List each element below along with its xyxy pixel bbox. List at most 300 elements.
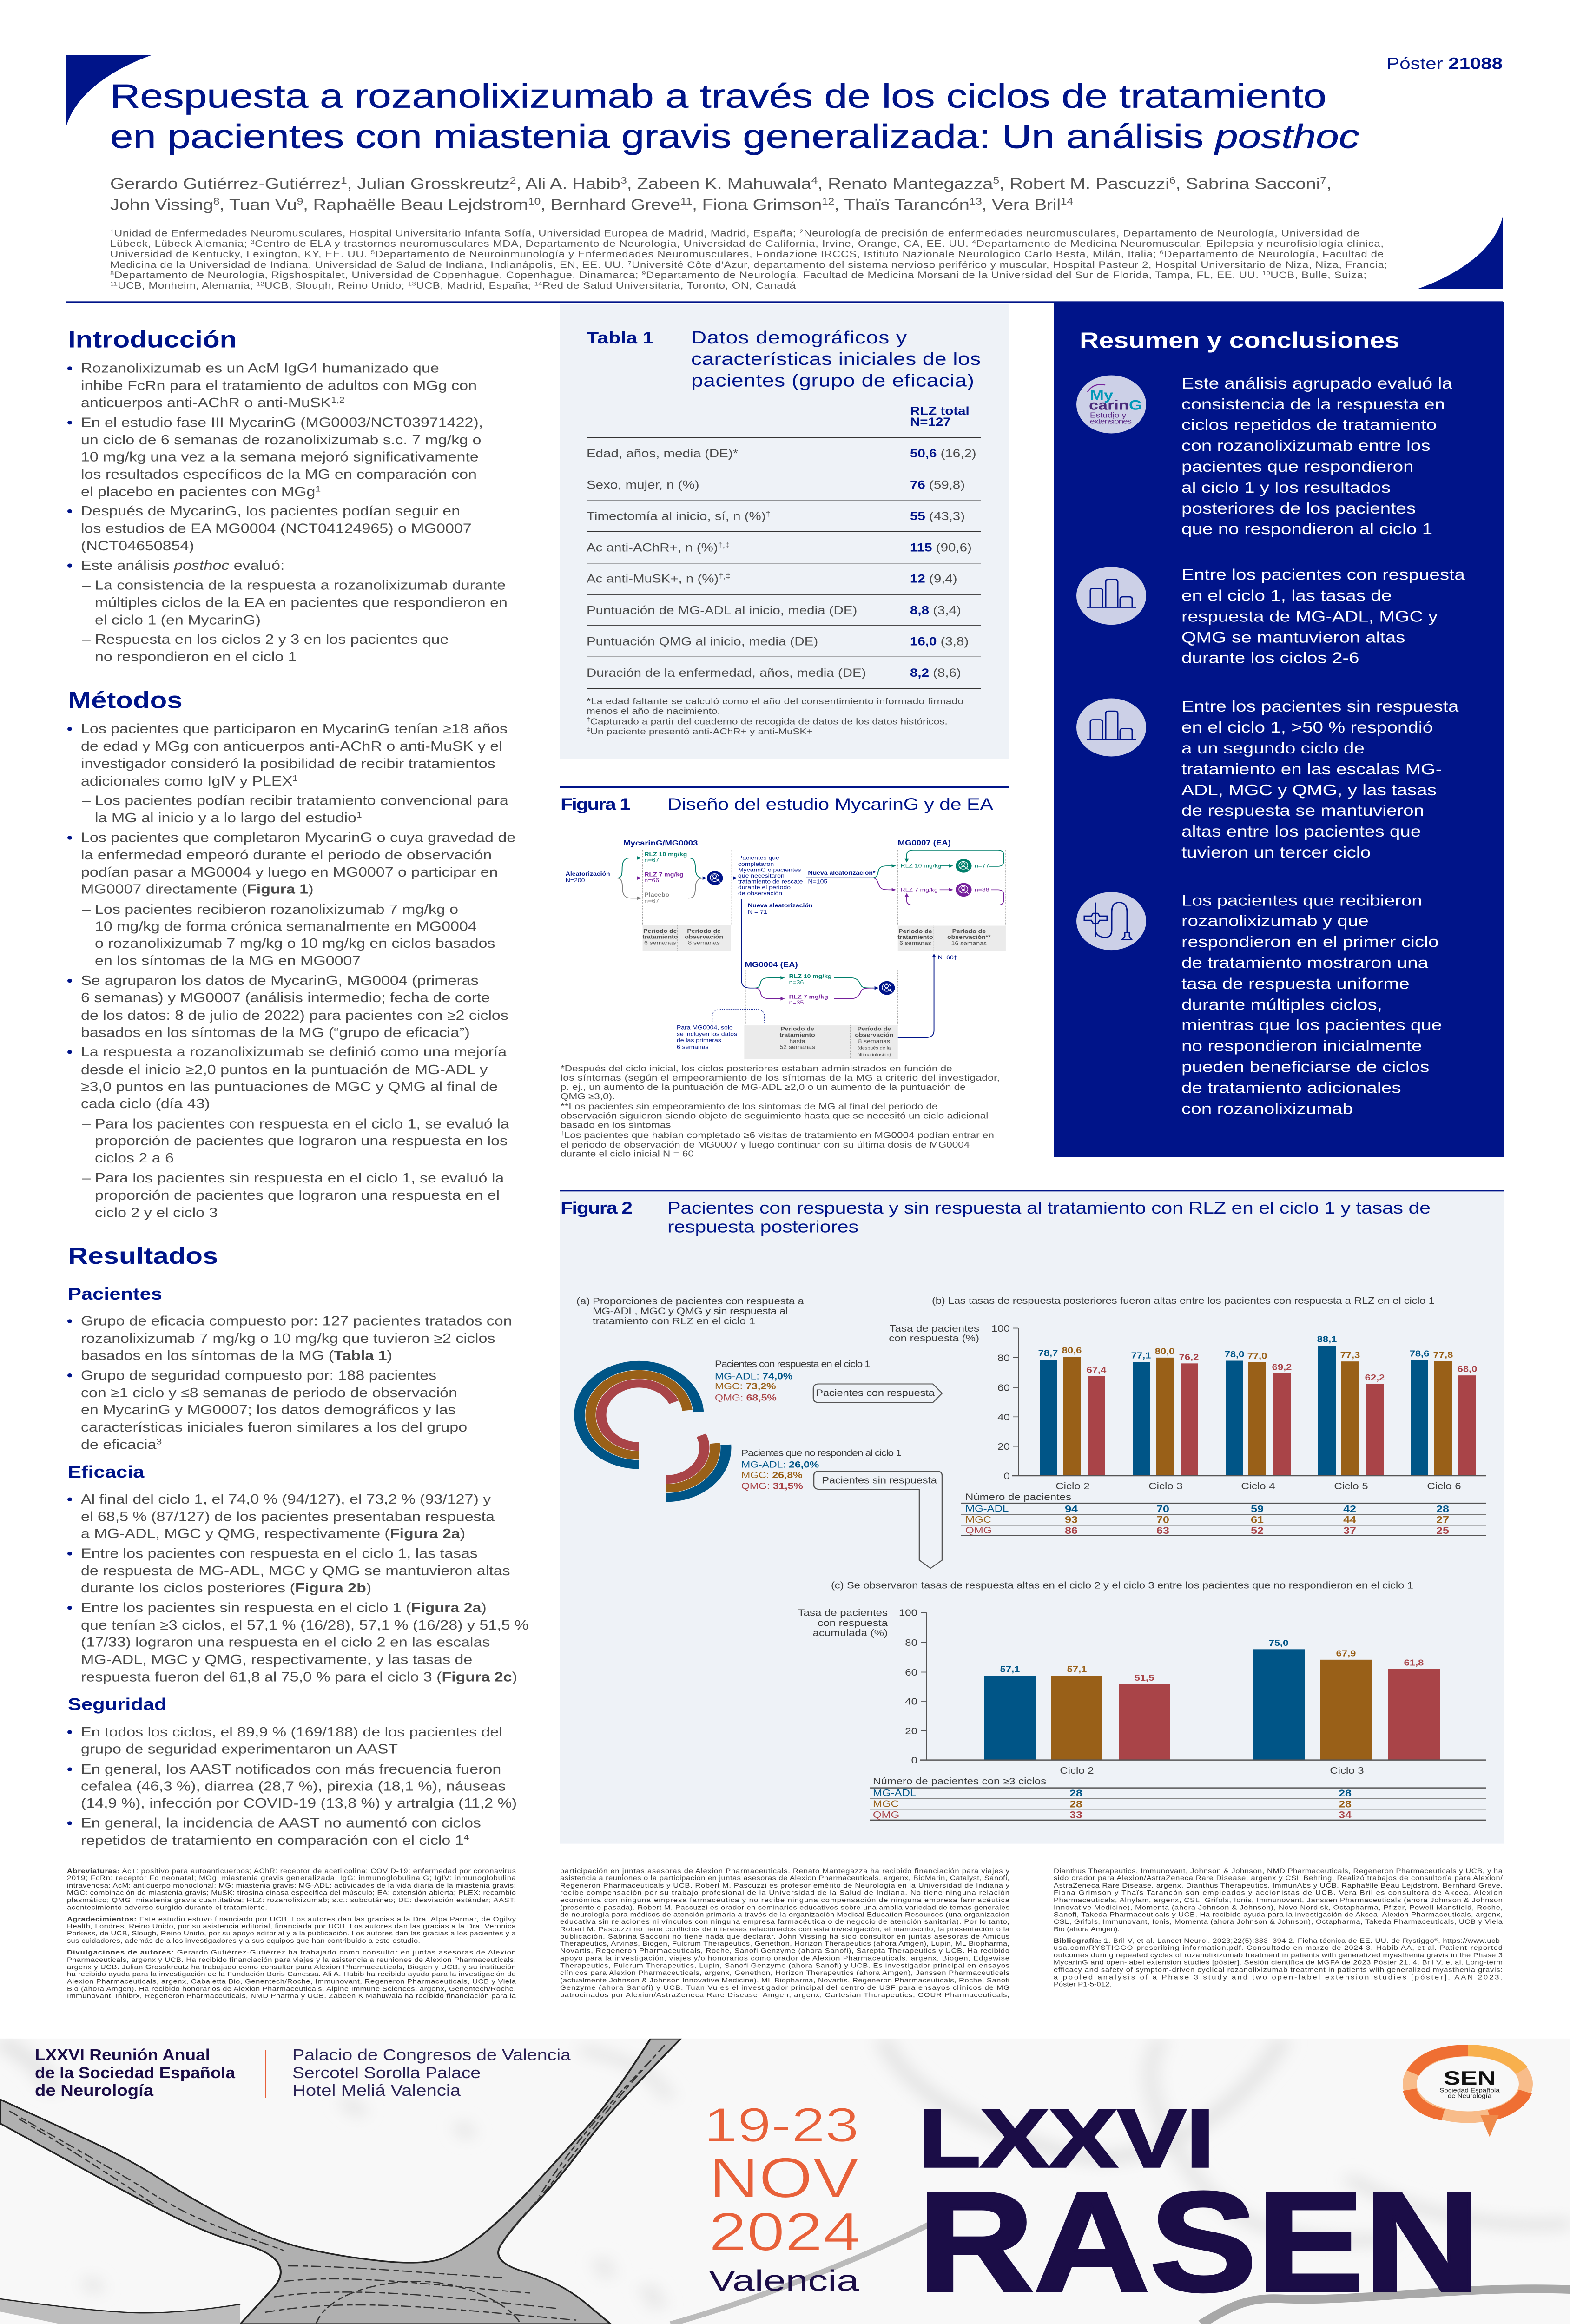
chart b patient table bbox=[961, 1492, 1486, 1536]
chart b patient table: 61 bbox=[1251, 1514, 1264, 1525]
footer text column 2: clínicos para Alexion Pharmaceuticals, argenx, Genethon, Horizon Therapeutics (ahora Amgen), Janssen Pharmaceuticals bbox=[560, 1969, 1009, 1977]
text block: seguridad bullets bbox=[67, 1724, 517, 1848]
footer text column 1: 2019; FcRn: receptor Fc neonatal; MGg: miastenia gravis generalizada; IgG: inmunoglobulina G; IgIV: inmunoglobulina bbox=[67, 1875, 516, 1882]
note on MG0004 bbox=[677, 1024, 738, 1050]
chart c y axis label: con respuesta bbox=[818, 1618, 888, 1628]
poster number: Póster 21088 bbox=[1386, 55, 1503, 73]
non-responder legend: Pacientes que no responden al ciclo 1 bbox=[741, 1448, 902, 1458]
text block: métodos bullets: proporción de pacientes que lograron una respuesta en el bbox=[95, 1188, 500, 1202]
title bbox=[110, 77, 1359, 155]
title: Respuesta a rozanolixizumab a través de los ciclos de tratamiento bbox=[110, 77, 1326, 115]
table footnotes: †Capturado a partir del cuaderno de recogida de datos de los datos históricos. bbox=[587, 716, 948, 726]
text block: eficacia bullets: durante los ciclos posteriores (Figura 2b) bbox=[81, 1580, 371, 1595]
text block: métodos bullets: – bbox=[82, 1171, 91, 1186]
subfigure b heading: (b) Las tasas de respuesta posteriores fueron altas entre los pacientes con respuesta a RLZ en el ciclo 1 bbox=[932, 1295, 1435, 1306]
mycaring arm labels: n=66 bbox=[644, 877, 659, 884]
table rows: Timectomía al inicio, sí, n (%)† bbox=[587, 510, 771, 523]
text block: métodos bullets: Para los pacientes con respuesta en el ciclo 1, se evaluó la bbox=[95, 1116, 509, 1131]
text block: seguridad bullets: grupo de seguridad experimentaron un AAST bbox=[81, 1742, 398, 1756]
text block: métodos bullets: ciclo 2 y el ciclo 3 bbox=[95, 1205, 218, 1220]
MG0004 labels bbox=[748, 902, 957, 1006]
chart b axis ticks bbox=[991, 1323, 1010, 1481]
logo: SEN: de Neurología bbox=[1448, 2093, 1491, 2099]
flowchart headings bbox=[623, 838, 951, 969]
text block: métodos bullets: cada ciclo (día 43) bbox=[81, 1096, 210, 1111]
footer text column 3: sido orador para Alexion/AstraZeneca Rare Disease, argenx y CSL Behring. Realizó trabajos de consultoría para Alexion/ bbox=[1054, 1875, 1503, 1882]
footer text column 1: Porkess, de UCB, Slough, Reino Unido, por su apoyo editorial y a la publicación. Los autores dan las gracias a los pacientes y a bbox=[67, 1930, 516, 1937]
summary text 2: en el ciclo 1, las tasas de bbox=[1181, 587, 1392, 604]
text block: métodos bullets: la MG al inicio y a lo largo del estudio1 bbox=[95, 811, 362, 825]
chart c y axis label bbox=[798, 1608, 888, 1638]
chart b values: 80,0 bbox=[1155, 1347, 1174, 1356]
table column header: N=127 bbox=[910, 415, 951, 428]
figura 2 title: respuesta posteriores bbox=[667, 1218, 858, 1236]
chart b axis ticks: 80 bbox=[997, 1353, 1010, 1363]
footer text column 3: efficacy and safety of symptom-driven cyclical rozanolixizumab treatment in patients with generalized myasthenia gravis: bbox=[1054, 1967, 1503, 1974]
summary text 1: que no respondieron al ciclo 1 bbox=[1181, 520, 1432, 537]
text block: introducción bullets: La consistencia de la respuesta a rozanolixizumab durante bbox=[95, 578, 506, 593]
figura 1 footnotes: p. ej., un aumento de la puntuación de MG-ADL ≥2,0 o un aumento de la puntuación de bbox=[561, 1083, 966, 1092]
footer text column 1: plasmático; QMG: miastenia gravis cuantitativa; RLZ: rozanolixizumab; s.c.: subcutáneo; DE: desviación estándar; AAST: bbox=[67, 1897, 516, 1904]
flowchart: figura 1 bbox=[566, 838, 1006, 1059]
text block: introducción bullets: anticuerpos anti-AChR o anti-MuSK1,2 bbox=[81, 395, 345, 410]
figura 2 label: Figura 2 bbox=[561, 1199, 633, 1217]
footer text column 2: publicación. Sabrina Sacconi no tiene nada que declarar. John Vissing ha sido consultor en juntas asesoras de Amicus bbox=[560, 1933, 1009, 1940]
chart b axis ticks: 0 bbox=[1004, 1471, 1010, 1481]
chart c values: 75,0 bbox=[1269, 1638, 1288, 1648]
period labels: tratamiento bbox=[897, 934, 933, 940]
text block: métodos bullets: o rozanolixizumab 7 mg/kg o 10 mg/kg en ciclos basados bbox=[95, 936, 495, 951]
summary text 3: a un segundo ciclo de bbox=[1181, 739, 1365, 757]
footer text column 2: Therapeutics, Arvinas, Biogen, Fulcrum Therapeutics, Genethon, Horizon Therapeutics (ahora Amgen), Lupin, ML Biopharma, bbox=[560, 1940, 1009, 1947]
chart b values: 78,6 bbox=[1410, 1349, 1429, 1359]
figura 1 footnotes: **Los pacientes sin empeoramiento de los síntomas de MG al final del periodo de bbox=[561, 1102, 937, 1111]
chart b categories: Ciclo 3 bbox=[1148, 1481, 1183, 1492]
summary text 4: con rozanolixizumab bbox=[1181, 1100, 1353, 1117]
chart b values: 62,2 bbox=[1365, 1373, 1385, 1383]
affiliations: 8Departamento de Neurología, Rigshospitalet, Universidad de Copenhague, Copenhague, Dinamarca; 9Departamento de Neurología, Facultad de Medicina Morsani de la Universidad del Sur de Florida, Tampa, FL, EE. UU. 10UCB, Bulle, Suiza; bbox=[110, 270, 1366, 280]
non-responder legend: MGC: 26,8% bbox=[741, 1471, 803, 1480]
congress name bbox=[35, 2046, 236, 2099]
table rows: 55 (43,3) bbox=[910, 510, 965, 523]
affiliations: 11UCB, Monheim, Alemania; 12UCB, Slough, Reino Unido; 13UCB, Madrid, España; 14Red de Salud Universitaria, Toronto, ON, Canadá bbox=[110, 280, 796, 290]
large LXXVI: LXXVI bbox=[918, 2093, 1214, 2185]
heading: Resultados: Resultados bbox=[68, 1243, 218, 1269]
banner: congress footer bbox=[0, 2039, 1570, 2324]
period labels: Período de bbox=[952, 928, 986, 934]
table label: Tabla 1 bbox=[587, 329, 654, 347]
table rows: 16,0 (3,8) bbox=[910, 635, 969, 648]
text block: métodos bullets: proporción de pacientes que lograron una respuesta en los bbox=[95, 1134, 508, 1149]
arrow callout: pacientes sin respuesta: Pacientes sin respuesta bbox=[822, 1475, 937, 1486]
summary text 3: ADL, MGC y QMG, y las tasas bbox=[1181, 781, 1437, 799]
text block: pacientes bullets: rozanolixizumab 7 mg/kg o 10 mg/kg que tuvieron ≥2 ciclos bbox=[81, 1331, 495, 1346]
summary text 4: rozanolixizumab y que bbox=[1181, 912, 1369, 930]
footer text column 2: (presente o pasada). Robert M. Pascuzzi es orador en seminarios educativos sobre una amplia variedad de temas generales bbox=[560, 1904, 1009, 1911]
text block: introducción bullets: – bbox=[82, 632, 91, 647]
chart b patient table: 25 bbox=[1436, 1525, 1449, 1536]
period labels bbox=[642, 928, 991, 1057]
summary text 1: pacientes que respondieron bbox=[1181, 457, 1414, 475]
congress name: LXXVI Reunión Anual bbox=[35, 2046, 210, 2064]
footer text column 2: (actualmente Johnson & Johnson Innovative Medicine), ML Biopharma, Novartis, Regeneron Pharmaceuticals, Roche, Sanofi bbox=[560, 1977, 1009, 1984]
chart b values: 78,7 bbox=[1038, 1349, 1058, 1358]
panel: tabla 1 bbox=[560, 304, 1009, 759]
summary text 4: Los pacientes que recibieron bbox=[1181, 891, 1422, 909]
footer text column 3: Sanofi, Takeda Pharmaceuticals y UCB. Ha recibido ayuda para la investigación de Akcea, Alexion Pharmaceuticals, argenx, bbox=[1054, 1911, 1503, 1918]
text block: introducción bullets: no respondieron en el ciclo 1 bbox=[95, 649, 297, 664]
mycaring arm labels: RLZ 10 mg/kg bbox=[644, 851, 687, 858]
subfigure a heading: MG-ADL, MGC y QMG y sin respuesta al bbox=[593, 1306, 788, 1316]
table rows: Edad, años, media (DE)* bbox=[587, 447, 739, 460]
chart c patient table: MGC bbox=[873, 1798, 899, 1809]
figura 1 footnotes: †Los pacientes que habían completado ≥6 visitas de tratamiento en MG0004 podían entrar en bbox=[561, 1130, 994, 1140]
authors bbox=[110, 175, 1332, 213]
banner background haze bbox=[0, 2039, 1570, 2309]
text block: métodos bullets: La respuesta a rozanolixizumab se definió como una mejoría bbox=[81, 1044, 507, 1059]
text block: eficacia bullets: que tenían ≥3 ciclos, el 57,1 % (16/28), 57,1 % (16/28) y 51,5 % bbox=[81, 1618, 528, 1632]
venues: Palacio de Congresos de Valencia bbox=[292, 2046, 571, 2064]
footer text column 2: Therapeutics, Fulcrum Therapeutics, Lupin, Sanofi Genzyme (ahora Sanofi) y UCB. Es investigador principal en ensayos bbox=[560, 1962, 1009, 1969]
text block: métodos bullets: desde el inicio ≥2,0 puntos en la puntuación de MG-ADL y bbox=[81, 1062, 488, 1077]
chart c: bar chart bbox=[798, 1608, 1486, 1776]
period labels: 8 semanas bbox=[858, 1038, 891, 1044]
venues: Hotel Meliá Valencia bbox=[292, 2081, 461, 2099]
footer text column 1: Health, Londres, Reino Unido, por su asistencia editorial, financiada por UCB. Los autores dan las gracias a la Dra. Veronica bbox=[67, 1923, 516, 1930]
responder legend: MGC: 73,2% bbox=[715, 1382, 776, 1392]
MG0007 labels: RLZ 10 mg/kg bbox=[901, 863, 942, 869]
text block: eficacia bullets: el 68,5 % (87/127) de los pacientes presentaban respuesta bbox=[81, 1509, 495, 1524]
affiliations: Medicina de la Universidad de Indiana, Universidad de Salud de Indiana, Indianápolis, EN, EE. UU. 7Université Côte d'Azur, departamento del sistema nervioso periférico y muscular, Hospital Pasteur 2, Hospital Universitario de Niza, Niza, Francia; bbox=[110, 260, 1387, 270]
text block: introducción bullets: Respuesta en los ciclos 2 y 3 en los pacientes que bbox=[95, 632, 449, 647]
footer text column 2: asistencia a reuniones o la participación en juntas asesoras de Alexion Pharmaceuticals, argenx, BioMarin, Catalyst, Sanofi, bbox=[560, 1875, 1009, 1882]
authors: Gerardo Gutiérrez-Gutiérrez1, Julian Grosskreutz2, Ali A. Habib3, Zabeen K. Mahuwala4, Renato Mantegazza5, Robert M. Pascuzzi6, Sabrina Sacconi7, bbox=[110, 175, 1332, 192]
chart b categories bbox=[1055, 1481, 1461, 1492]
chart c axis ticks: 40 bbox=[905, 1696, 917, 1707]
icon: assessment navy MG0004 bbox=[879, 981, 895, 995]
footer text column 3: Dianthus Therapeutics, Immunovant, Johnson & Johnson, NMD Pharmaceuticals, Regeneron Pharmaceuticals y UCB, y ha bbox=[1054, 1868, 1503, 1875]
summary text 3: tratamiento en las escalas MG- bbox=[1181, 760, 1442, 778]
flowchart headings: MycarinG/MG0003 bbox=[623, 838, 698, 847]
icon: MycarinG logo: My bbox=[1090, 388, 1114, 403]
chart b values bbox=[1038, 1335, 1477, 1383]
figura 1 footnotes: QMG ≥3,0). bbox=[561, 1092, 615, 1102]
note on MG0004: Para MG0004, solo bbox=[677, 1024, 733, 1030]
chart b patient table: 42 bbox=[1343, 1503, 1356, 1514]
summary text 4: de tratamiento mostraron una bbox=[1181, 954, 1428, 971]
summary text 2: QMG se mantuvieron altas bbox=[1181, 628, 1405, 646]
period labels: tratamiento bbox=[779, 1032, 815, 1038]
completers text: completaron bbox=[738, 861, 774, 867]
table title: Datos demográficos y bbox=[691, 328, 907, 347]
figura 1 footnotes: basado en los síntomas bbox=[561, 1120, 671, 1130]
footer text column 2: Robert M. Pascuzzi no tiene conflictos de intereses relacionados con esta investigación, el manuscrito, la presentación o la bbox=[560, 1926, 1010, 1933]
table rows: Sexo, mujer, n (%) bbox=[587, 478, 699, 491]
chart c axis ticks: 80 bbox=[905, 1637, 917, 1648]
text block: seguridad bullets: En general, la incidencia de AAST no aumentó con ciclos bbox=[81, 1816, 481, 1830]
text block: pacientes bullets: basados en los síntomas de la MG (Tabla 1) bbox=[81, 1348, 392, 1363]
text block: métodos bullets: Los pacientes recibieron rozanolixizumab 7 mg/kg o bbox=[95, 902, 458, 917]
summary text 1: consistencia de la respuesta en bbox=[1181, 395, 1445, 413]
text block: introducción bullets: (NCT04650854) bbox=[81, 539, 194, 554]
summary text 1 bbox=[1181, 374, 1452, 537]
figura 1 footnotes: durante el ciclo inicial N = 60 bbox=[561, 1149, 694, 1159]
text block: métodos bullets: 10 mg/kg de forma crónica semanalmente en MG0004 bbox=[95, 919, 477, 934]
footer text column 1: acontecimiento adverso surgido durante el tratamiento. bbox=[67, 1904, 267, 1911]
summary text 2 bbox=[1181, 566, 1465, 667]
footer text column 3: Bio (ahora Amgen). bbox=[1054, 1926, 1120, 1933]
completers text: Pacientes que bbox=[738, 855, 779, 861]
chart b patient table: 52 bbox=[1251, 1525, 1264, 1536]
text block: introducción bullets bbox=[67, 361, 508, 664]
dates: 2024 bbox=[709, 2202, 861, 2262]
chart c axis ticks bbox=[899, 1608, 917, 1766]
footer text column 3: Fiona Grimson y Thaïs Tarancón son empleados y accionistas de UCB. Vera Bril es consultora de Akcea, Alexion bbox=[1054, 1889, 1503, 1896]
chart b values: 80,6 bbox=[1062, 1346, 1082, 1355]
table column header bbox=[910, 404, 970, 428]
chart c patient table: 33 bbox=[1069, 1809, 1082, 1820]
chart b patient table: 70 bbox=[1156, 1503, 1169, 1514]
text block: métodos bullets: – bbox=[82, 793, 91, 808]
text block: seguridad bullets: En todos los ciclos, el 89,9 % (169/188) de los pacientes del bbox=[81, 1724, 502, 1739]
text block: métodos bullets: Se agruparon los datos de MycarinG, MG0004 (primeras bbox=[81, 973, 479, 988]
logo: SEN: Sociedad Española bbox=[1439, 2087, 1500, 2093]
affiliations: 1Unidad de Enfermedades Neuromusculares, Hospital Universitario Infanta Sofía, Universidad Europea de Madrid, Madrid, España; 2Neurología de precisión de enfermedades neuromusculares, Departamento de Neurología, Universidad de bbox=[110, 228, 1359, 238]
chart b categories: Ciclo 6 bbox=[1427, 1481, 1461, 1492]
completers text bbox=[738, 855, 803, 897]
chart c patient table: Número de pacientes con ≥3 ciclos bbox=[873, 1776, 1046, 1787]
summary text 4: durante múltiples ciclos, bbox=[1181, 996, 1382, 1013]
period labels: 16 semanas bbox=[951, 940, 987, 946]
re-randomisation label MG0007 bbox=[808, 870, 876, 885]
dates: 19-23 bbox=[704, 2098, 859, 2152]
chart c values bbox=[1000, 1638, 1424, 1683]
period labels: Periodo de bbox=[643, 928, 677, 934]
authors: John Vissing8, Tuan Vu9, Raphaëlle Beau Lejdstrom10, Bernhard Greve11, Fiona Grimson12, Thaïs Tarancón13, Vera Bril14 bbox=[110, 196, 1073, 213]
summary text 2: respuesta de MG-ADL, MGC y bbox=[1181, 607, 1438, 625]
chart c y axis label: acumulada (%) bbox=[813, 1628, 888, 1638]
period labels: 6 semanas bbox=[644, 940, 676, 946]
text block: métodos bullets: 6 semanas) y MG0007 (análisis intermedio; fecha de corte bbox=[81, 990, 490, 1005]
summary text 4: respondieron en el primer ciclo bbox=[1181, 933, 1439, 951]
chart b patient table: MGC bbox=[965, 1514, 991, 1525]
table footnotes bbox=[587, 697, 963, 737]
text block: métodos bullets: ciclos 2 a 6 bbox=[95, 1150, 174, 1165]
period labels: 52 semanas bbox=[779, 1043, 815, 1050]
text block: seguridad bullets: repetidos de tratamiento en comparación con el ciclo 14 bbox=[81, 1833, 469, 1848]
period labels: 6 semanas bbox=[899, 940, 931, 946]
text block: métodos bullets: de los datos: 8 de julio de 2022) para pacientes con ≥2 ciclos bbox=[81, 1008, 508, 1023]
summary text 1: posteriores de los pacientes bbox=[1181, 499, 1416, 517]
table rows: 8,2 (8,6) bbox=[910, 666, 961, 679]
footer text column 2: de neurología para médicos de atención primaria a través de la organización Medical Education Resources (una organización bbox=[560, 1911, 1009, 1918]
footer text column 3 bbox=[1054, 1868, 1503, 1988]
figura 1 footnotes bbox=[561, 1064, 1000, 1159]
text block: pacientes bullets: de eficacia3 bbox=[81, 1437, 162, 1452]
footer text column 3: Pharmaceuticals, Alnylam, argenx, CSL, Grifols, Ionis, Immunovant, Janssen Pharmaceuticals (ahora Johnson & Johnson bbox=[1054, 1897, 1503, 1904]
corner shape: bottom right of header bbox=[1418, 217, 1503, 289]
table rows: 12 (9,4) bbox=[910, 572, 957, 585]
chart b patient table: 86 bbox=[1065, 1525, 1078, 1536]
grey period boxes bbox=[643, 850, 1006, 1059]
footer text column 3: Bibliografía: 1. Bril V, et al. Lancet Neurol. 2023;22(5):383–394 2. Ficha técnica de EE. UU. de Rystiggo®. https://www.ucb- bbox=[1054, 1937, 1503, 1945]
logo: SEN bbox=[1410, 2051, 1526, 2137]
chart b patient table: 59 bbox=[1251, 1503, 1264, 1514]
chart b axis ticks: 20 bbox=[997, 1441, 1010, 1452]
mycaring arm labels: RLZ 7 mg/kg bbox=[644, 871, 684, 878]
table title bbox=[691, 328, 981, 390]
chart b values: 77,0 bbox=[1247, 1352, 1267, 1361]
footer text column 3: Innovative Medicine), Momenta (ahora Johnson & Johnson), Novo Nordisk, Octapharma, Pfizer, Powell Mansfield, Roche, bbox=[1054, 1904, 1503, 1911]
footer text column 1: argenx y UCB. Julian Grosskreutz ha trabajado como consultor para Alexion Pharmaceuticals, Biogen y UCB, y su institución bbox=[67, 1964, 516, 1971]
table rows: Puntuación de MG-ADL al inicio, media (DE) bbox=[587, 604, 857, 617]
text block: introducción bullets: Este análisis posthoc evaluó: bbox=[81, 558, 284, 573]
summary text 3: tuvieron un tercer ciclo bbox=[1181, 843, 1371, 861]
footer text column 2: participación en juntas asesoras de Alexion Pharmaceuticals. Renato Mantegazza ha recibido financiación para viajes y bbox=[560, 1868, 1009, 1875]
completers text: tratamiento de rescate bbox=[738, 878, 803, 885]
randomisation label bbox=[566, 871, 610, 884]
heading: Métodos: Métodos bbox=[68, 687, 183, 713]
chart c categories: Ciclo 2 bbox=[1060, 1765, 1094, 1776]
large RASEN: RASEN bbox=[918, 2163, 1480, 2321]
summary text 4: no respondieron inicialmente bbox=[1181, 1037, 1422, 1055]
period labels: (después de la bbox=[858, 1046, 891, 1050]
subfigure a heading: (a) bbox=[576, 1296, 590, 1306]
summary text 2: Entre los pacientes con respuesta bbox=[1181, 566, 1465, 583]
footer text column 1: Pharmaceuticals, argenx y UCB. Ha recibido financiación para viajes y la asistencia a reuniones de Alexion Pharmaceuticals, bbox=[67, 1956, 516, 1963]
logo: SEN: SEN bbox=[1444, 2067, 1496, 2089]
chart c values: 67,9 bbox=[1336, 1649, 1356, 1658]
chart c y axis label: Tasa de pacientes bbox=[798, 1608, 888, 1618]
footer text column 2: Genzyme (ahora Sanofi) y UCB. Tuan Vu es el investigador principal del centro de USF para ensayos clínicos de MG bbox=[560, 1984, 1009, 1991]
text block: introducción bullets: el ciclo 1 (en MycarinG) bbox=[95, 613, 261, 627]
text block: eficacia bullets: MG-ADL, MGC y QMG, respectivamente, y las tasas de bbox=[81, 1652, 472, 1667]
chart b patient table: 93 bbox=[1065, 1514, 1078, 1525]
text block: eficacia bullets: (17/33) lograron una respuesta en el ciclo 2 en las escalas bbox=[81, 1635, 490, 1650]
chart c patient table: 28 bbox=[1069, 1788, 1082, 1799]
table rows: 115 (90,6) bbox=[910, 541, 972, 554]
chart c axis ticks: 20 bbox=[905, 1726, 917, 1736]
table rows: 76 (59,8) bbox=[910, 478, 965, 491]
text block: introducción bullets: un ciclo de 6 semanas de rozanolixizumab s.c. 7 mg/kg o bbox=[81, 432, 481, 447]
text block: métodos bullets: de edad y MGg con anticuerpos anti-AChR o anti-MuSK y el bbox=[81, 739, 502, 753]
MG0007 labels: n=77 bbox=[975, 863, 989, 869]
text block: introducción bullets: los estudios de EA MG0004 (NCT04124965) o MG0007 bbox=[81, 521, 472, 536]
affiliations: Lübeck, Lübeck Alemania; 3Centro de ELA y trastornos neuromusculares MDA, Departamento de Neurología, Universidad de California, Irvine, Orange, CA, EE. UU. 4Departamento de Medicina Neuromuscular, Epilepsia y neurofisiología clínica, bbox=[110, 238, 1384, 249]
period labels: tratamiento bbox=[642, 933, 678, 940]
chart c axis ticks: 100 bbox=[899, 1608, 917, 1618]
text block: pacientes bullets: en MycarinG y MG0007; los datos demográficos y las bbox=[81, 1402, 456, 1417]
chart b values: 67,4 bbox=[1087, 1366, 1107, 1375]
summary text 1: ciclos repetidos de tratamiento bbox=[1181, 416, 1437, 433]
text block: métodos bullets: investigador consideró la posibilidad de recibir tratamientos bbox=[81, 756, 495, 771]
footer text column 1: MGC: combinación de miastenia gravis; MuSK: tirosina cinasa específica del músculo; EA: extensión abierta; PLEX: recambio bbox=[67, 1889, 516, 1896]
chart b patient table: 44 bbox=[1343, 1514, 1356, 1525]
footer text column 2: Regeneron Pharmaceuticals y UCB. Robert M. Pascuzzi es profesor emérito de Neurología en la Universidad de Indiana y bbox=[560, 1882, 1009, 1889]
footer text column 3: Póster P1-5-012. bbox=[1054, 1981, 1112, 1988]
subheading: Pacientes: Pacientes bbox=[68, 1285, 162, 1303]
chart c values: 57,1 bbox=[1067, 1665, 1087, 1674]
chart c patient table: 34 bbox=[1339, 1809, 1352, 1820]
title: en pacientes con miastenia gravis generalizada: Un análisis posthoc bbox=[110, 118, 1359, 155]
MG0004 labels: RLZ 10 mg/kg bbox=[789, 973, 832, 979]
summary text 1: al ciclo 1 y los resultados bbox=[1181, 478, 1391, 496]
table rows bbox=[587, 447, 976, 679]
chart b patient table: Número de pacientes bbox=[965, 1492, 1071, 1502]
summary text 4: tasa de respuesta uniforme bbox=[1181, 975, 1410, 992]
table rows: Duración de la enfermedad, años, media (DE) bbox=[587, 666, 866, 679]
venues: Sercotel Sorolla Palace bbox=[292, 2064, 481, 2081]
congress name: de Neurología bbox=[35, 2081, 154, 2099]
summary text 3: altas entre los pacientes que bbox=[1181, 822, 1421, 840]
arrow callout: pacientes con respuesta: Pacientes con respuesta bbox=[816, 1387, 935, 1398]
footer text column 2 bbox=[560, 1868, 1010, 1999]
text block: seguridad bullets: (14,9 %), infección por COVID-19 (13,8 %) y artralgia (11,2 %) bbox=[81, 1796, 517, 1811]
dates bbox=[704, 2098, 861, 2262]
icon: MycarinG logo bbox=[1076, 376, 1146, 433]
MG0007 labels: n=88 bbox=[975, 887, 989, 893]
text block: pacientes bullets: Grupo de eficacia compuesto por: 127 pacientes tratados con bbox=[81, 1314, 512, 1328]
summary text 1: con rozanolixizumab entre los bbox=[1181, 436, 1431, 454]
table column header: RLZ total bbox=[910, 404, 970, 417]
chart c patient table: 28 bbox=[1069, 1798, 1082, 1809]
chart b values: 77,1 bbox=[1131, 1351, 1151, 1360]
text block: introducción bullets: 10 mg/kg una vez a la semana mejoró significativamente bbox=[81, 449, 479, 464]
icon: assessment green bbox=[956, 859, 972, 873]
chart c values: 57,1 bbox=[1000, 1665, 1020, 1674]
summary text 4: mientras que los pacientes que bbox=[1181, 1016, 1442, 1034]
chart a: non-responder arcs bbox=[666, 1435, 726, 1498]
panel: figura 2 bbox=[560, 1190, 1504, 1844]
text block: métodos bullets: Los pacientes podían recibir tratamiento convencional para bbox=[95, 793, 508, 808]
MG0004 labels: RLZ 7 mg/kg bbox=[789, 994, 828, 1000]
chart c categories: Ciclo 3 bbox=[1330, 1765, 1364, 1776]
text block: seguridad bullets: cefalea (46,3 %), diarrea (28,7 %), pirexia (18,1 %), náuseas bbox=[81, 1779, 506, 1794]
footer text column 2: apoyo para la investigación, viajes y/o honorarios como orador de Alexion Pharmaceuticals, argenx, Biogen, Edgewise bbox=[560, 1955, 1009, 1962]
chart b patient table: QMG bbox=[965, 1525, 992, 1536]
text block: introducción bullets: el placebo en pacientes con MGg1 bbox=[81, 484, 321, 499]
footer text column 1 bbox=[67, 1868, 516, 2000]
text block: métodos bullets: adicionales como IgIV y PLEX1 bbox=[81, 774, 298, 788]
table footnotes: *La edad faltante se calculó como el año del consentimiento informado firmado bbox=[587, 697, 963, 706]
table footnotes: menos el año de nacimiento. bbox=[587, 706, 720, 716]
text block: métodos bullets: la enfermedad empeoró durante el periodo de observación bbox=[81, 848, 492, 863]
text block: pacientes bullets: Grupo de seguridad compuesto por: 188 pacientes bbox=[81, 1368, 436, 1383]
table title: pacientes (grupo de eficacia) bbox=[691, 370, 974, 390]
chart b values: 78,0 bbox=[1225, 1350, 1244, 1360]
affiliations: Universidad de Kentucky, Lexington, KY, EE. UU. 5Departamento de Neuroinmunología y Enfermedades Neuromusculares, Fondazione IRCCS, Istituto Nazionale Neurologico Carlo Besta, Milán, Italia; 6Departamento de Neurología, Facultad de bbox=[110, 249, 1384, 259]
text block: métodos bullets: basados en los síntomas de la MG (“grupo de eficacia”) bbox=[81, 1025, 470, 1040]
chart b: bar chart bbox=[889, 1323, 1486, 1492]
panel: resumen y conclusiones bbox=[1054, 302, 1504, 1157]
arrow callout: pacientes con respuesta bbox=[813, 1384, 942, 1403]
text block: eficacia bullets: de respuesta de MG-ADL, MGC y QMG se mantuvieron altas bbox=[81, 1564, 510, 1578]
summary text 3: Entre los pacientes sin respuesta bbox=[1181, 697, 1459, 715]
subfigure a heading: tratamiento con RLZ en el ciclo 1 bbox=[593, 1316, 755, 1327]
text block: métodos bullets: Para los pacientes sin respuesta en el ciclo 1, se evaluó la bbox=[95, 1171, 504, 1186]
text block: métodos bullets: podían pasar a MG0004 y luego en MG0007 o participar en bbox=[81, 865, 498, 879]
figura 1 title: Diseño del estudio MycarinG y de EA bbox=[667, 795, 994, 814]
table rows: 50,6 (16,2) bbox=[910, 447, 976, 460]
footer text column 3: MycarinG and open-label extension studies [póster]. Sesión científica de MGFA de 2023 Póster 21. 4. Bril V, et al. Long-term bbox=[1054, 1959, 1503, 1966]
chart b bars bbox=[1040, 1346, 1476, 1476]
mycaring arm labels: Placebo bbox=[644, 891, 669, 898]
responder legend: Pacientes con respuesta en el ciclo 1 bbox=[715, 1360, 871, 1369]
footer text column 3: outcomes during repeated cycles of rozanolixizumab treatment in patients with generalized myasthenia gravis in the Phase 3 bbox=[1054, 1952, 1503, 1959]
text block: eficacia bullets: a MG-ADL, MGC y QMG, respectivamente (Figura 2a) bbox=[81, 1526, 465, 1541]
chart b axis ticks: 60 bbox=[997, 1382, 1010, 1393]
period labels: 8 semanas bbox=[688, 940, 720, 946]
